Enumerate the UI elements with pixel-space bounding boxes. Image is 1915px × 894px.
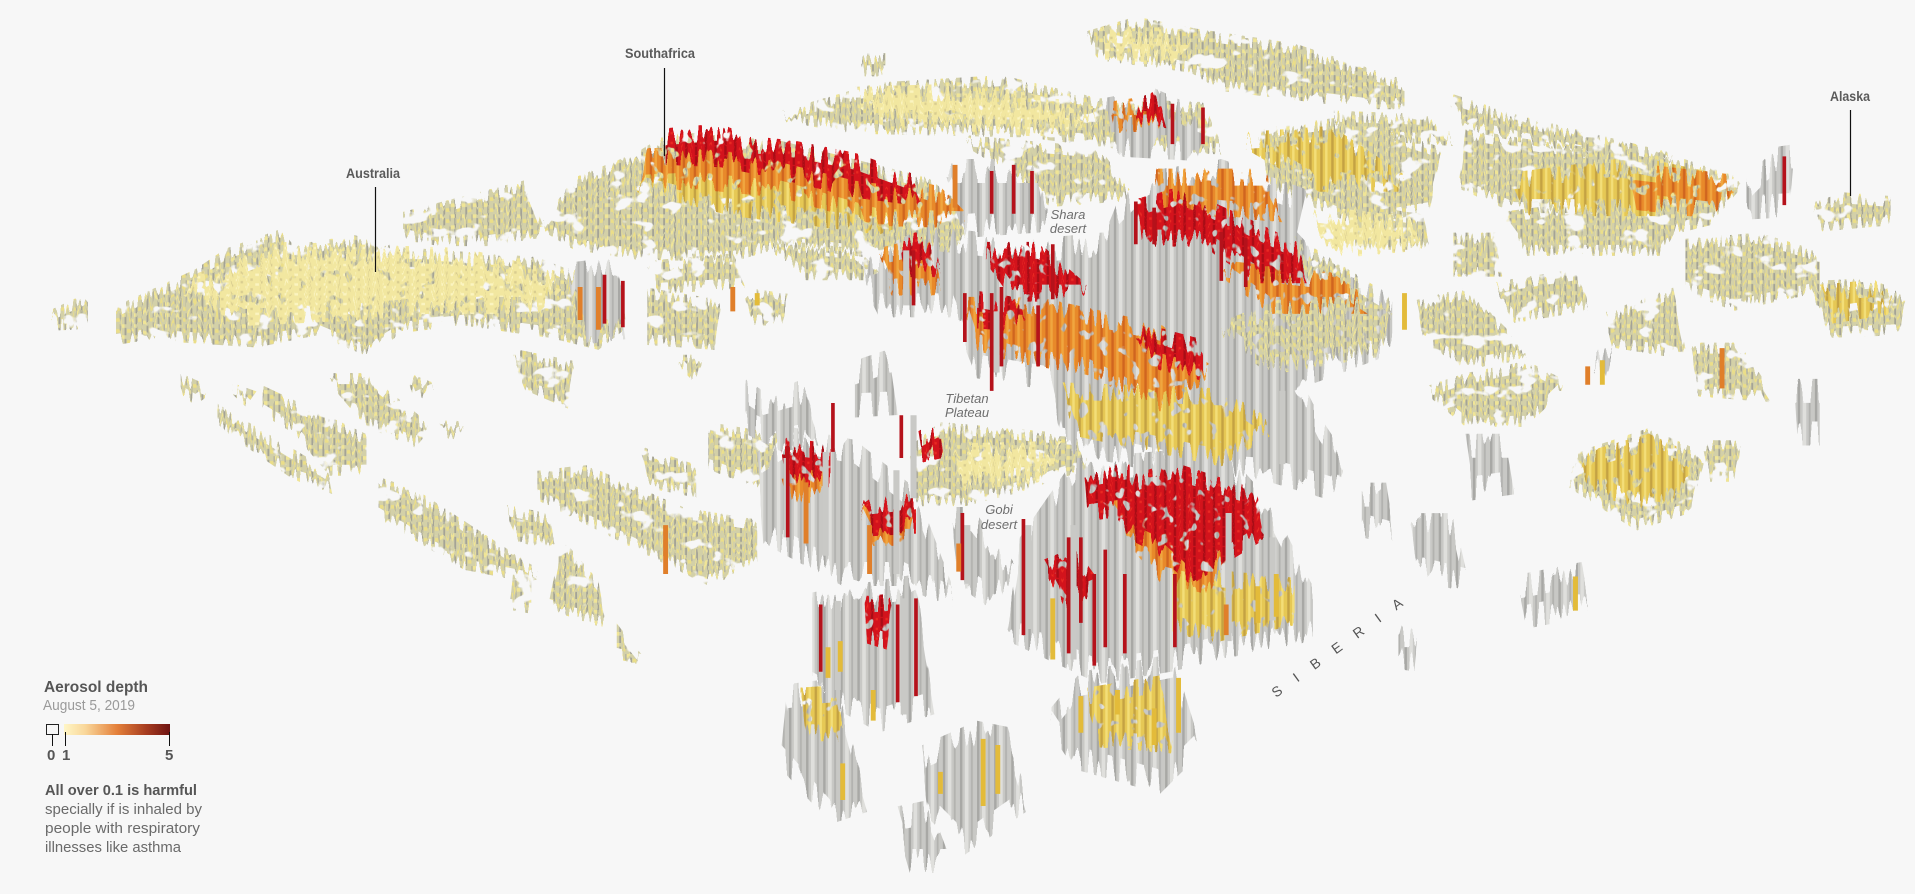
legend note: specially if is inhaled by xyxy=(45,801,202,818)
region: red hot spots xyxy=(666,98,1307,641)
colour scale: 1 xyxy=(62,747,70,764)
region: orange zones xyxy=(641,103,1734,586)
colour scale xyxy=(46,724,173,764)
legend note: illnesses like asthma xyxy=(45,839,182,856)
colour scale: 0 xyxy=(47,747,55,764)
label: Siberia: SIBERIA xyxy=(1268,594,1406,700)
label: Shara desert: Shara xyxy=(1051,207,1085,222)
label: Alaska: Alaska xyxy=(1830,88,1870,104)
label: Australia xyxy=(346,165,400,272)
label: Australia: Australia xyxy=(346,165,400,181)
legend note: people with respiratory xyxy=(45,820,200,837)
label: Southafrica: Southafrica xyxy=(625,45,695,61)
legend title: Aerosol depth xyxy=(44,679,148,696)
legend date: August 5, 2019 xyxy=(43,697,135,714)
label: Tibetan Plateau: Tibetan xyxy=(945,391,989,406)
tall bars: coloured columns xyxy=(580,104,1784,806)
label: Gobi desert: Gobi xyxy=(985,502,1014,517)
label: Gobi desert: desert xyxy=(981,517,1018,532)
label: Southafrica xyxy=(625,45,695,156)
region: far cells, grey and yellow base xyxy=(51,22,1905,660)
label: Alaska xyxy=(1830,88,1870,196)
region: yellow tops xyxy=(183,34,1893,745)
legend note: All over 0.1 is harmful xyxy=(45,782,197,799)
colour scale: 5 xyxy=(165,747,173,764)
legend xyxy=(43,679,206,856)
label: Tibetan Plateau: Plateau xyxy=(945,405,989,420)
label: Shara desert: desert xyxy=(1050,221,1087,236)
region: tall grey cells xyxy=(568,100,1820,861)
